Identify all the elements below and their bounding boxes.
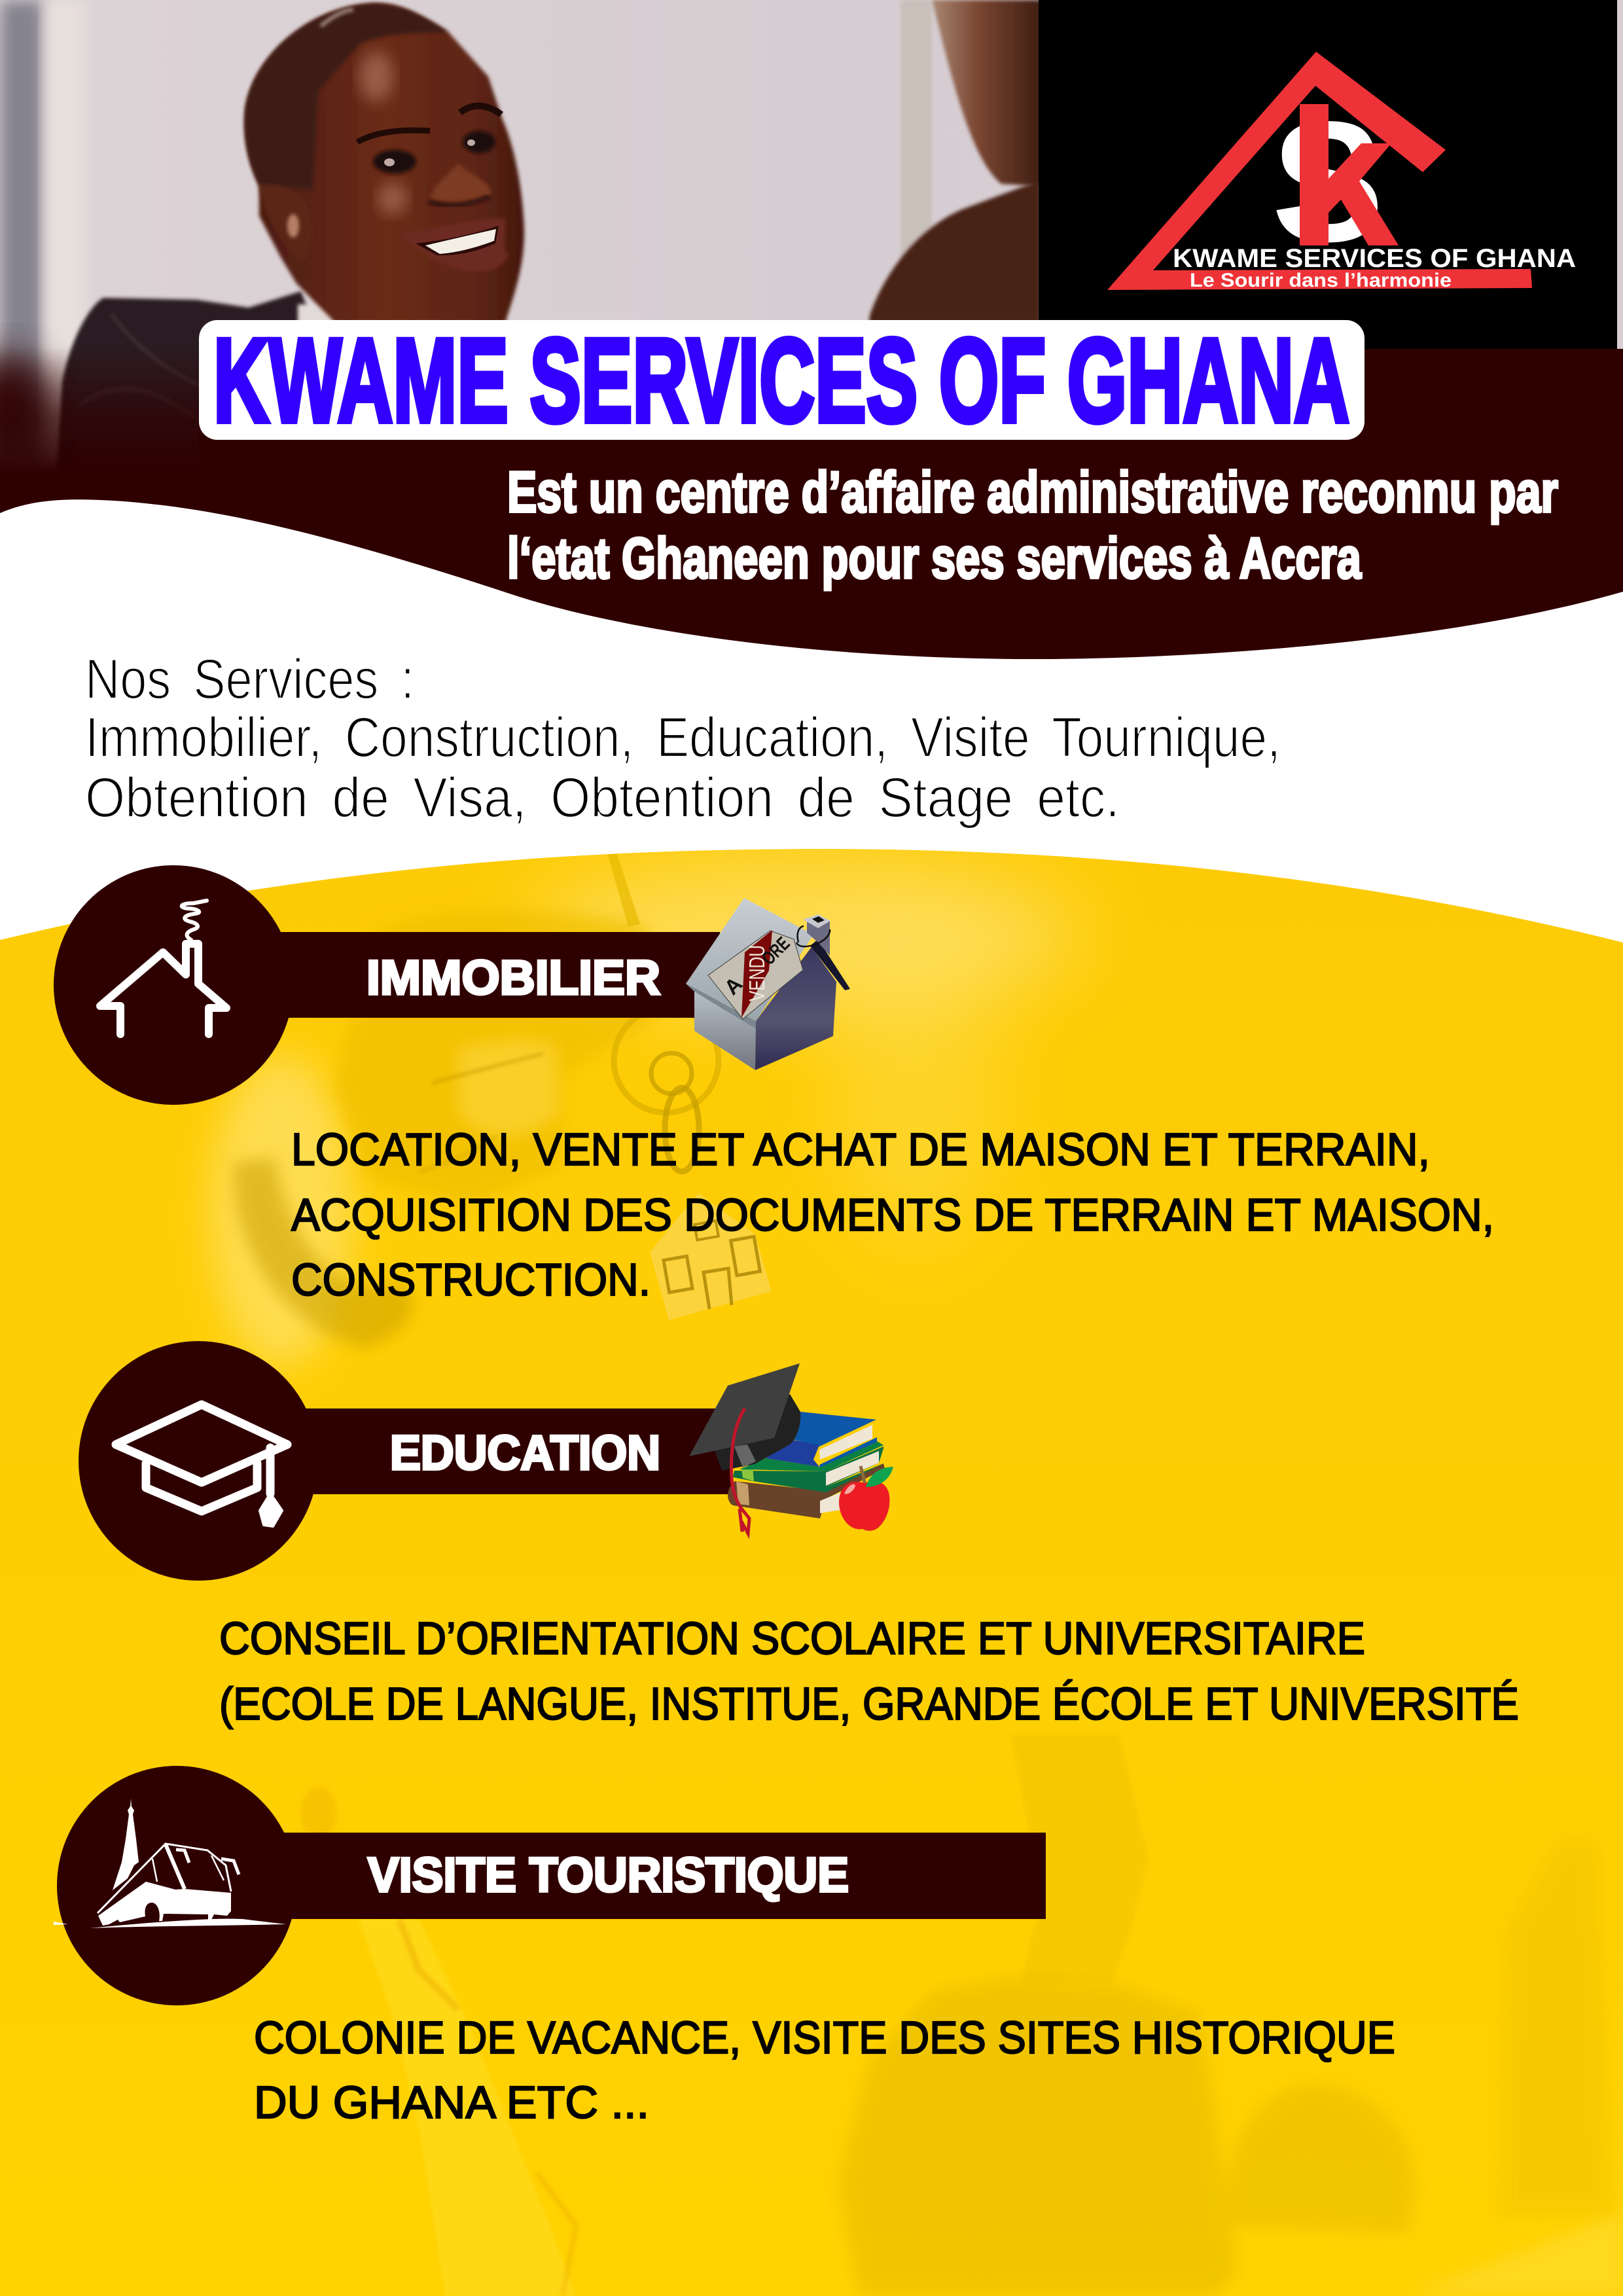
icon: books with cap and apple [689,1363,893,1534]
panel: immobilier [54,865,850,1105]
services intro text: Nos Services : [85,648,414,711]
logo [1039,0,1617,349]
tourism label: VISITE TOURISTIQUE [368,1848,849,1902]
icon: tour bus and spire [54,1799,286,1928]
tourism description [254,2012,1395,2128]
icon: house for sale [686,898,850,1070]
immobilier label: IMMOBILIER [366,950,660,1005]
white wave [0,499,1623,942]
services intro text [85,648,1281,829]
services intro text: Obtention de Visa, Obtention de Stage etc. [85,766,1120,829]
immobilier description: LOCATION, VENTE ET ACHAT DE MAISON ET TERRAIN, [291,1124,1430,1175]
icon: house for sale: VENDU [745,945,769,1001]
immobilier description [291,1124,1494,1305]
icon: house outline [100,901,226,1034]
immobilier banner [54,865,720,1105]
header photograph [0,0,1623,524]
immobilier description: CONSTRUCTION. [291,1254,651,1305]
tourism description: COLONIE DE VACANCE, VISITE DES SITES HISTORIQUE [254,2012,1395,2063]
watermark: monuments [300,1734,1623,2296]
tourism description: DU GHANA ETC ... [254,2077,649,2128]
yellow background panel [0,849,1623,2296]
education description [219,1613,1519,1729]
logo letter S: S [1272,86,1384,278]
tourism banner [57,1766,1046,2005]
watermark: hand holding house key [209,848,1080,1368]
logo roof triangle [1107,52,1532,290]
icon: graduation cap outline [116,1405,287,1526]
education banner [79,1341,733,1581]
subtitle: l‘etat Ghaneen pour ses services à Accra [507,526,1362,590]
immobilier description: ACQUISITION DES DOCUMENTS DE TERRAIN ET MAISON, [291,1189,1494,1240]
services intro text: Immobilier, Construction, Education, Visite Tournique, [85,706,1281,769]
panel: visite touristique [54,1766,1046,2005]
icon: house for sale: A [719,972,747,999]
education label: EDUCATION [390,1426,660,1480]
education description: CONSEIL D’ORIENTATION SCOLAIRE ET UNIVERSITAIRE [219,1613,1365,1664]
logo name: KWAME SERVICES OF GHANA [1173,244,1576,273]
icon: house for sale: ORE [758,933,794,969]
logo letter K [1300,104,1399,245]
subtitle [507,459,1558,590]
education description: (ECOLE DE LANGUE, INSTITUE, GRANDE ÉCOLE ET UNIVERSITÉ [219,1678,1519,1729]
logo slogan: Le Sourir dans l’harmonie [1190,270,1452,291]
panel: education [79,1341,893,1581]
dark brown band [0,349,1623,668]
